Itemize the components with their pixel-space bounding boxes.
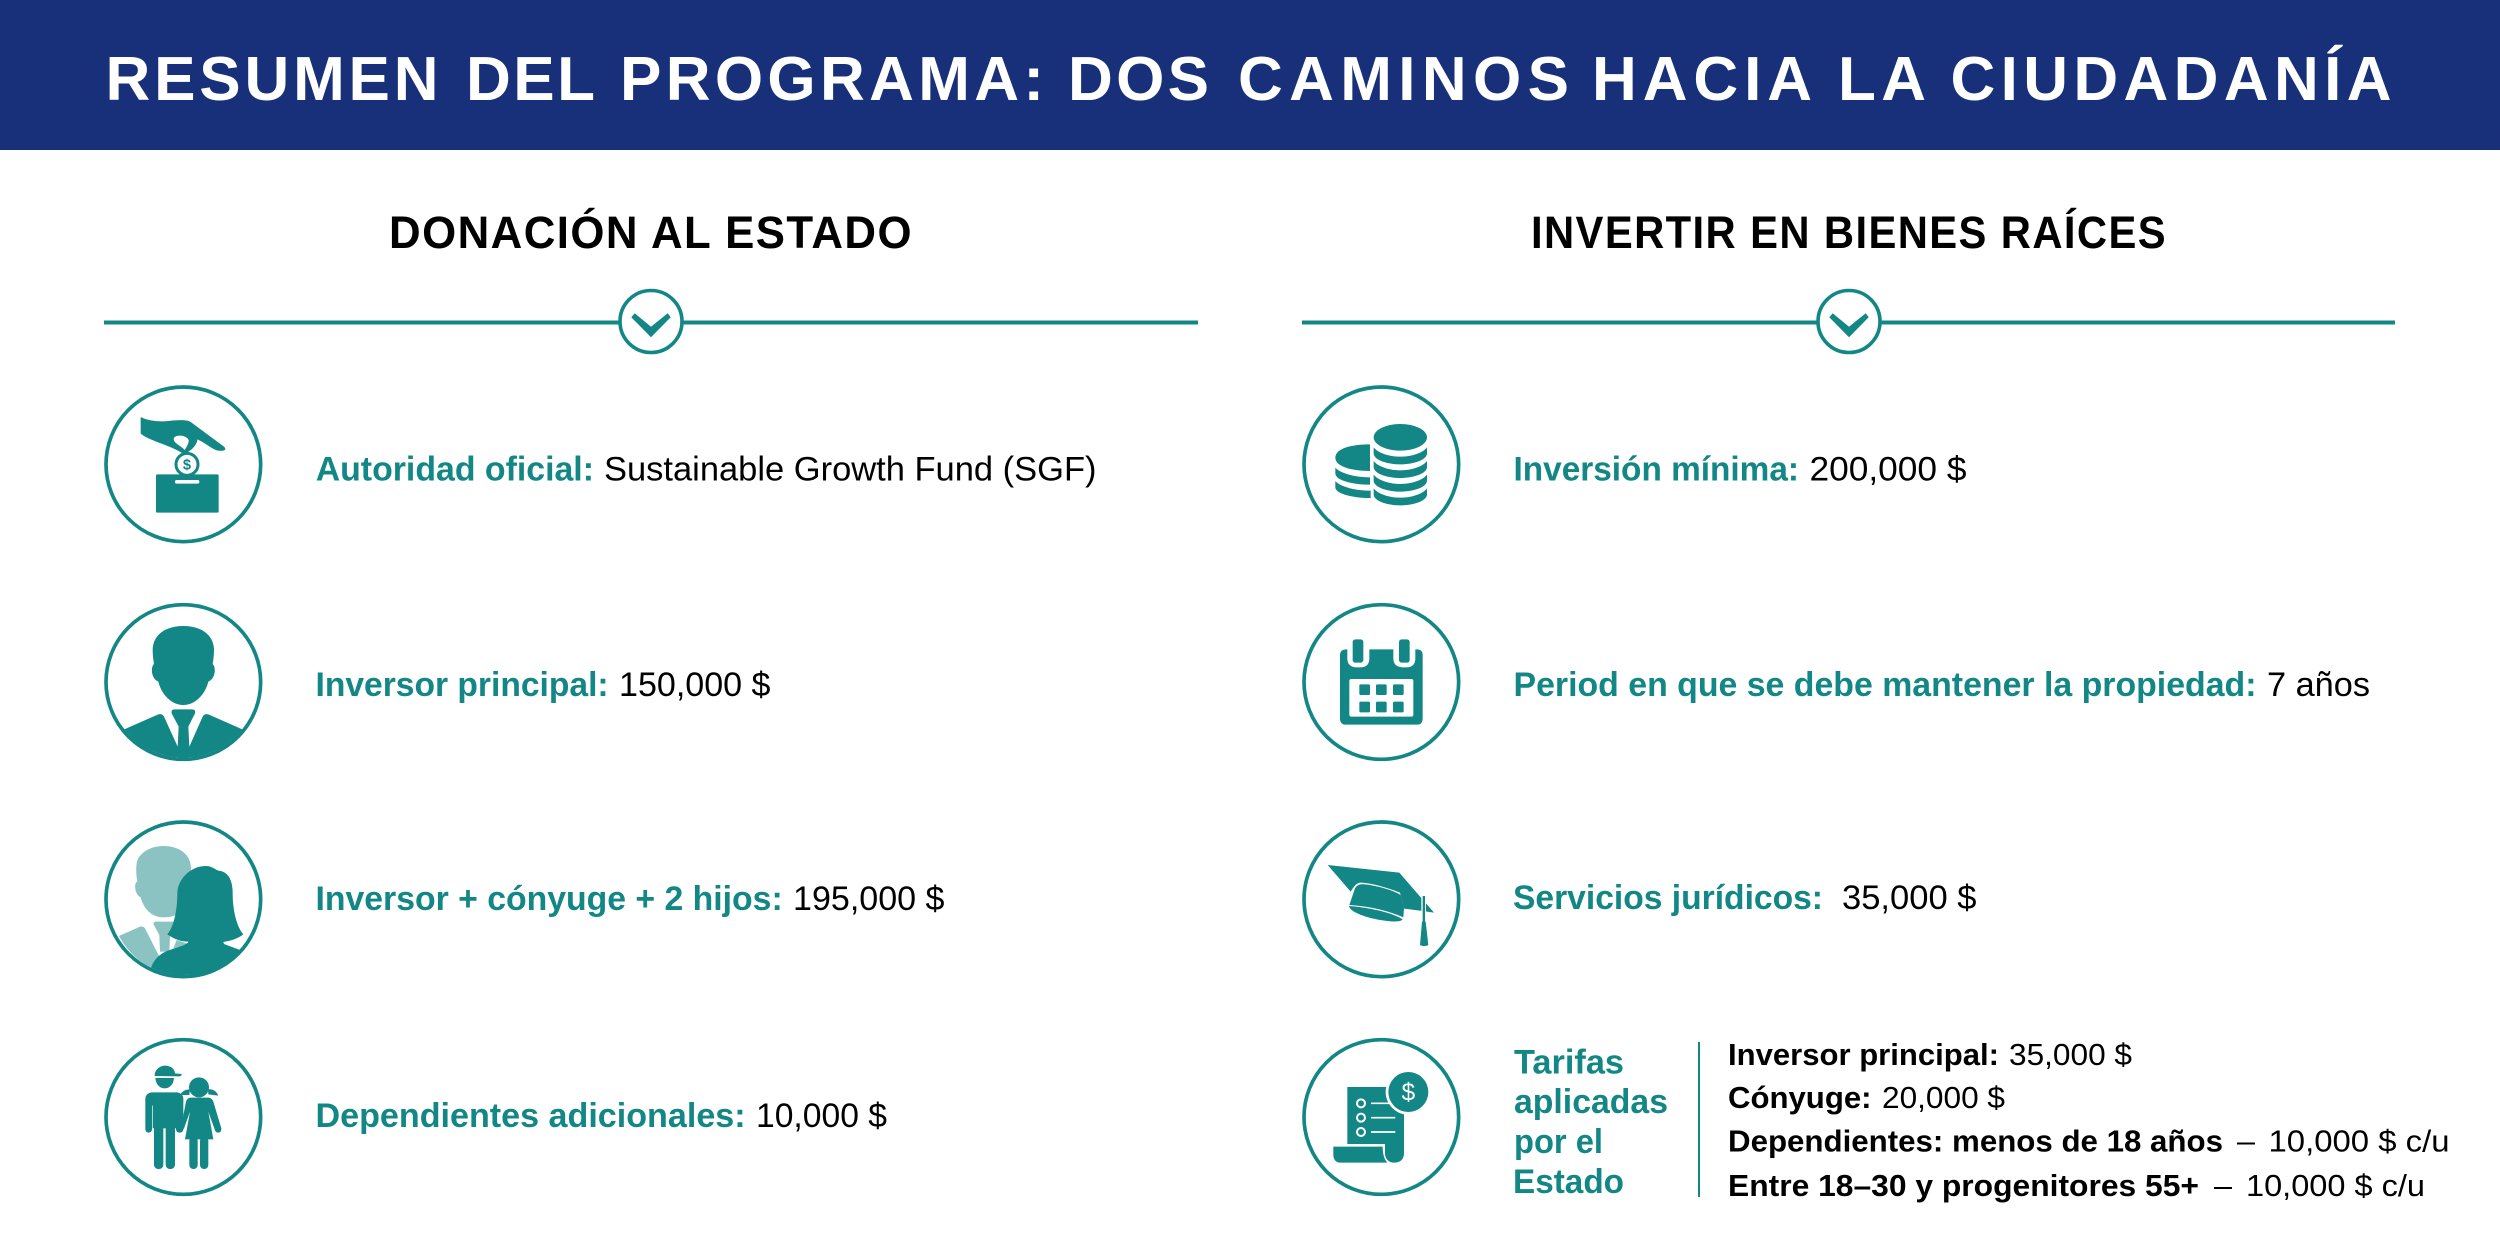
label: tarifas aplicadas por el estado: Estado <box>1513 1163 1624 1201</box>
icon: hand dropping coin into box <box>106 387 261 542</box>
fee: inversor principal: Inversor principal: <box>1728 1037 1999 1072</box>
title: LA <box>1838 45 1926 114</box>
row: dependientes adicionales: Dependientes adicionales: <box>316 1097 746 1135</box>
row: inversor principal: 150,000 $ <box>619 666 771 704</box>
icon: hand dropping coin into box: $ <box>183 457 191 473</box>
header banner <box>0 0 2500 150</box>
panel: donación al estado <box>104 207 1198 1194</box>
heading: donación al estado: DONACIÓN AL ESTADO <box>389 207 913 258</box>
row: servicios jurídicos: 35,000 $ <box>1842 879 1977 917</box>
title: DEL <box>466 45 595 114</box>
fee: cónyuge: 20,000 $ <box>1882 1080 2005 1115</box>
row: periodo de mantenimiento: Period en que se debe mantener la propiedad: <box>1514 666 2256 704</box>
row: periodo de mantenimiento: 7 años <box>2267 666 2370 704</box>
label: tarifas aplicadas por el estado: por el <box>1514 1123 1603 1161</box>
icon: coin stacks <box>1304 387 1459 542</box>
fee: entre 18-30 y progenitores 55+: Entre 18–30 y progenitores 55+ <box>1728 1168 2199 1203</box>
title: DOS <box>1068 45 1209 114</box>
icon: man in suit <box>106 605 261 759</box>
title: RESUMEN <box>106 45 438 114</box>
fee: dependientes menores de 18 <box>1728 1124 2450 1159</box>
row: inversor principal <box>316 666 771 704</box>
icon: couple silhouettes <box>106 822 261 977</box>
icon: invoice scroll with dollar coin: $ <box>1401 1080 1415 1107</box>
fee: entre 18-30 y progenitores 55+: – <box>2214 1168 2233 1203</box>
title <box>106 45 2392 114</box>
row: inversor principal: Inversor principal: <box>316 666 609 704</box>
row: inversor + cónyuge + 2 hijos: 195,000 $ <box>793 880 945 918</box>
divider with chevron <box>1302 290 2395 352</box>
label: tarifas aplicadas por el estado <box>1513 1043 1668 1201</box>
label: tarifas aplicadas por el estado: Tarifas <box>1514 1043 1624 1081</box>
fee list <box>1728 1037 2450 1203</box>
row: inversión mínima: Inversión mínima: <box>1514 451 1799 489</box>
fee: dependientes menores de 18: 10,000 $ c/u <box>2268 1124 2450 1159</box>
fee: entre 18-30 y progenitores 55+: 10,000 $ c/u <box>2246 1168 2425 1203</box>
title: CAMINOS <box>1238 45 1569 114</box>
fee: entre 18-30 y progenitores 55+ <box>1728 1168 2425 1203</box>
heading: invertir en bienes raíces: INVERTIR EN BIENES RAÍCES <box>1531 207 2167 258</box>
row: autoridad oficial: Sustainable Growth Fund (SGF) <box>604 451 1096 489</box>
row: servicios jurídicos: Servicios jurídicos: <box>1513 879 1823 917</box>
icon: two children <box>106 1040 261 1194</box>
row: inversor + cónyuge + 2 hijos: Inversor + cónyuge + 2 hijos: <box>316 880 783 918</box>
label: tarifas aplicadas por el estado: aplicadas <box>1514 1083 1668 1121</box>
row: dependientes adicionales: 10,000 $ <box>756 1097 887 1135</box>
row: autoridad oficial: Autoridad oficial: <box>316 451 594 489</box>
title: CIUDADANÍA <box>1950 45 2392 114</box>
icon: invoice scroll with dollar coin <box>1304 1040 1459 1194</box>
title: PROGRAMA: <box>620 45 1044 114</box>
vertical separator <box>1698 1042 1700 1197</box>
fee: cónyuge <box>1728 1080 2005 1115</box>
icon: calendar <box>1304 605 1459 759</box>
row: inversión mínima: 200,000 $ <box>1810 451 1967 489</box>
icon: graduation cap <box>1304 822 1459 977</box>
fee: dependientes menores de 18: Dependientes: menos de 18 años <box>1728 1124 2223 1159</box>
fee: cónyuge: Cónyuge: <box>1728 1080 1872 1115</box>
fee: inversor principal <box>1728 1037 2132 1072</box>
fee: inversor principal: 35,000 $ <box>2009 1037 2132 1072</box>
fee: dependientes menores de 18: – <box>2237 1124 2256 1159</box>
row: inversión mínima <box>1514 451 1967 489</box>
divider with chevron <box>104 290 1198 352</box>
row: autoridad oficial <box>316 451 1096 489</box>
title: HACIA <box>1592 45 1812 114</box>
row: servicios jurídicos <box>1513 879 1977 917</box>
panel: invertir en bienes raíces <box>1302 207 2450 1203</box>
